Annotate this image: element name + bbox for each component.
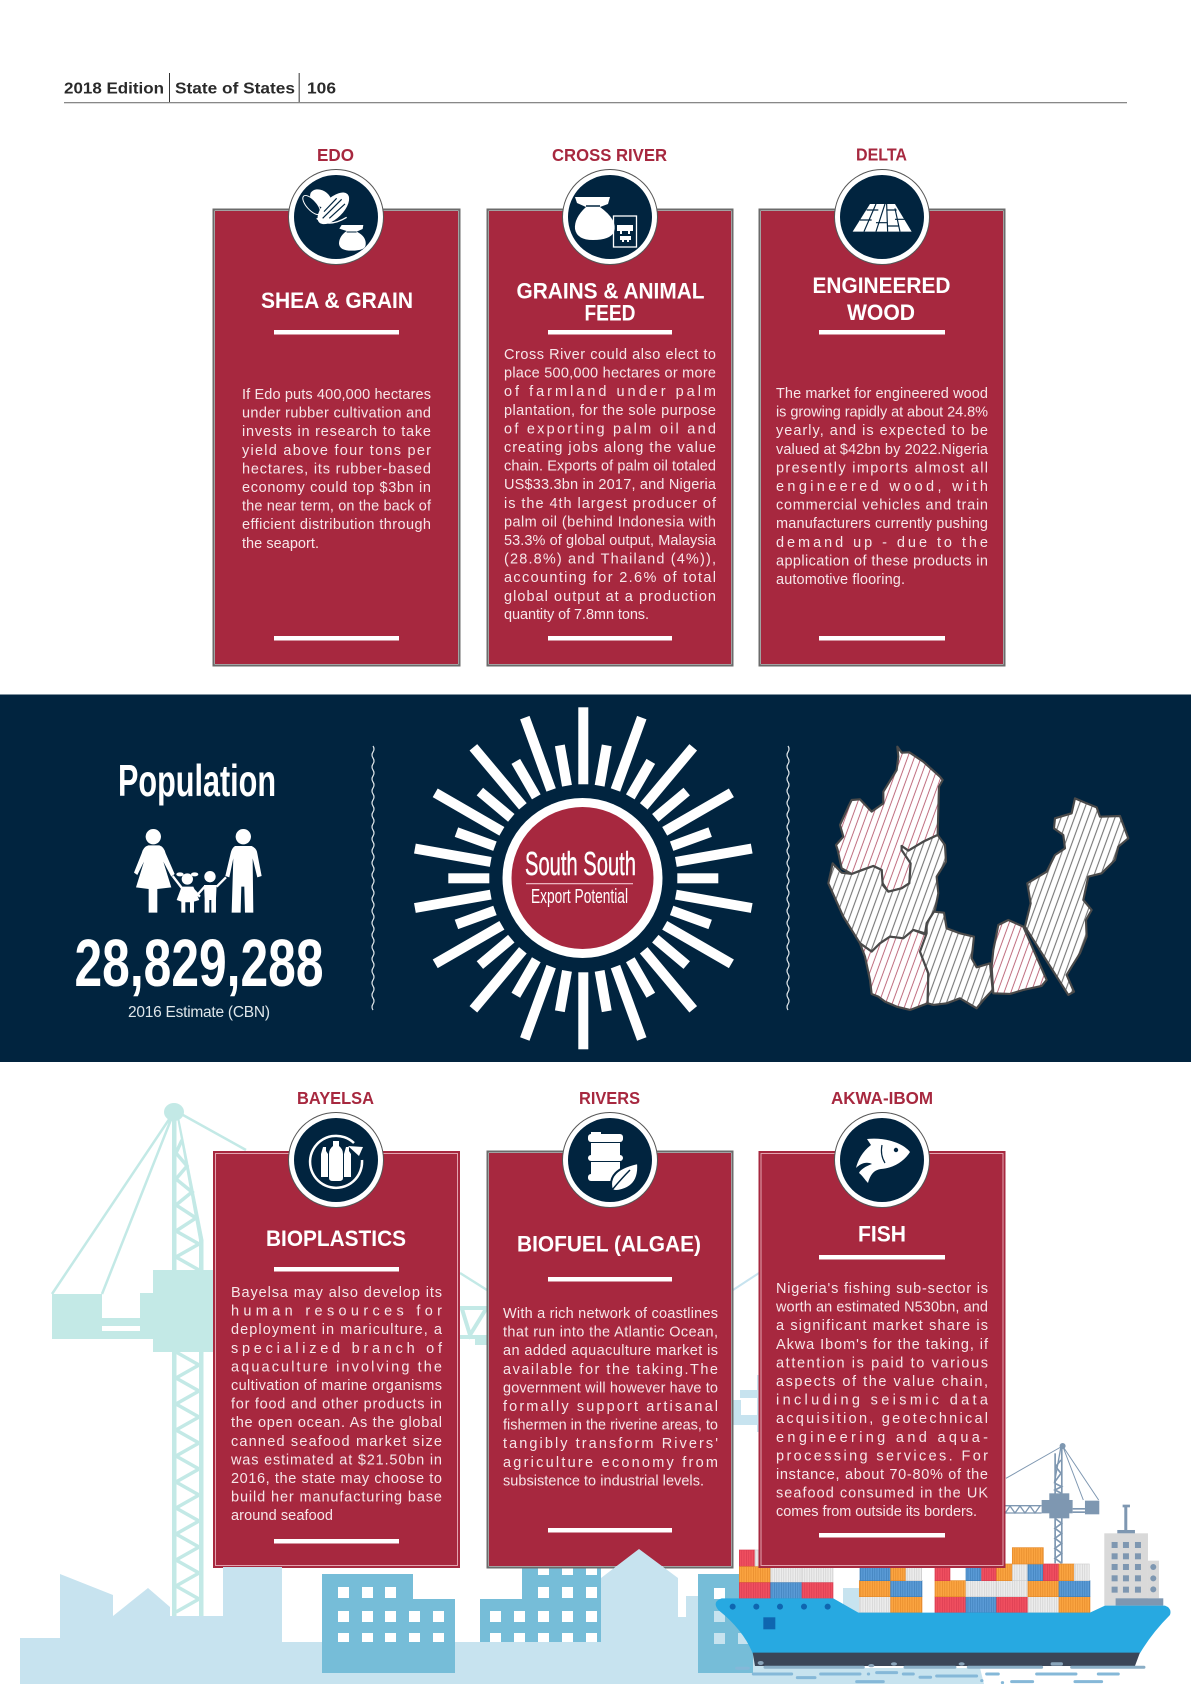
icon: fish — [834, 1112, 930, 1208]
icon: family — [134, 829, 262, 913]
body text: Cross River could also elect to — [504, 347, 716, 363]
body text: quantity of 7.8mn tons. — [504, 607, 649, 623]
body text: aquaculture involving the — [231, 1359, 442, 1375]
panel: Delta engineered wood — [758, 144, 1006, 666]
centre circle — [502, 798, 662, 958]
illustration: container ship and port crane — [716, 1443, 1171, 1683]
map region: Delta — [828, 835, 946, 952]
state label: CROSS RIVER — [552, 145, 667, 165]
body text: formally support artisanal — [503, 1399, 718, 1415]
body text: seafood consumed in the UK — [776, 1486, 988, 1502]
sunburst badge — [414, 707, 753, 1049]
edition label: 2018 Edition — [64, 80, 164, 98]
body text: was estimated at $21.50bn in — [230, 1452, 442, 1468]
sunburst rays — [414, 707, 753, 1049]
body text: chain. Exports of palm oil totaled — [504, 459, 716, 475]
panel: population and map band — [0, 694, 1191, 1062]
body text — [775, 1281, 989, 1520]
icon: barrel and leaf — [562, 1112, 658, 1208]
body text: including seismic data — [776, 1393, 989, 1409]
body text: fishermen in the riverine areas, to — [503, 1418, 718, 1434]
illustration: blue building left — [322, 1574, 455, 1673]
body text: that run into the Atlantic Ocean, — [503, 1325, 718, 1341]
body text: application of these products in — [776, 553, 988, 569]
illustration: large harbour crane — [52, 1103, 760, 1616]
map region: Cross River — [1025, 798, 1128, 995]
body text: worth an estimated N530bn, and — [775, 1300, 988, 1316]
body text: presently imports almost all — [776, 460, 988, 476]
body text: economy could top $3bn in — [242, 480, 431, 496]
body text: government will however have to — [503, 1380, 718, 1396]
heading: FISH — [858, 1222, 906, 1246]
body text: 53.3% of global output, Malaysia — [504, 533, 717, 549]
state label: DELTA — [856, 144, 907, 164]
icon: recycled bottles — [288, 1112, 384, 1208]
heading: ENGINEERED — [812, 273, 950, 298]
body text: the near term, on the back of — [242, 499, 432, 515]
body text: processing services. For — [776, 1448, 988, 1464]
body text: hectares, its rubber-based — [242, 461, 431, 477]
icon: shea nuts and sack — [288, 169, 384, 265]
body text: for food and other products in — [231, 1397, 442, 1413]
body text: comes from outside its borders. — [776, 1504, 977, 1520]
body text: an added aquaculture market is — [503, 1343, 718, 1359]
body text: global output at a production — [504, 589, 716, 605]
body text: plantation, for the sole purpose — [504, 403, 716, 419]
state label: RIVERS — [579, 1088, 640, 1108]
body text — [230, 1285, 443, 1524]
body text: under rubber cultivation and — [242, 406, 431, 422]
body text: deployment in mariculture, a — [231, 1322, 443, 1338]
body text: of exporting palm oil and — [504, 421, 716, 437]
body text: automotive flooring. — [776, 572, 905, 588]
body text: is growing rapidly at about 24.8% — [776, 405, 988, 421]
body text: demand up - due to the — [776, 535, 988, 551]
body text: US$33.3bn in 2017, and Nigeria — [504, 477, 717, 493]
body text — [242, 387, 432, 552]
map region: Edo — [836, 747, 943, 892]
icon: wood planks — [834, 169, 930, 265]
body text: specialized branch of — [231, 1341, 443, 1357]
body text: a significant market share is — [776, 1318, 988, 1334]
badge subtitle: Export Potential — [531, 886, 628, 908]
body text: creating jobs along the value — [504, 440, 716, 456]
ship superstructure — [1104, 1505, 1163, 1606]
body text: 2016, the state may choose to — [231, 1471, 442, 1487]
body text: (28.8%) and Thailand (4%)), — [504, 552, 716, 568]
body text: available for the taking.The — [503, 1362, 718, 1378]
state label: AKWA-IBOM — [831, 1088, 933, 1108]
body text: tangibly transform Rivers' — [503, 1436, 718, 1452]
body text: engineered wood, with — [776, 479, 988, 495]
body text: yearly, and is expected to be — [776, 423, 988, 439]
state label: EDO — [317, 145, 354, 165]
body text: accounting for 2.6% of total — [504, 570, 716, 586]
icon: grain sack and feed bag — [562, 169, 658, 265]
body text: is the 4th largest producer of — [504, 496, 717, 512]
body text: acquisition, geotechnical — [776, 1411, 988, 1427]
illustration: blue building behind skyline — [480, 1560, 601, 1642]
body text: commercial vehicles and train — [776, 498, 988, 514]
cargo containers — [739, 1548, 1090, 1613]
body text: instance, about 70-80% of the — [776, 1467, 988, 1483]
body text: engineering and aqua- — [776, 1430, 988, 1446]
body text: build her manufacturing base — [231, 1490, 442, 1506]
body text — [776, 386, 989, 588]
body text: Bayelsa may also develop its — [231, 1285, 442, 1301]
water ripples — [737, 1667, 1144, 1683]
heading: GRAINS & ANIMAL — [516, 278, 704, 304]
body text: With a rich network of coastlines — [503, 1306, 718, 1322]
body text: attention is paid to various — [776, 1355, 988, 1371]
body text: place 500,000 hectares or more — [504, 366, 716, 382]
heading: FEED — [584, 300, 636, 326]
body text: human resources for — [231, 1304, 442, 1320]
body text: around seafood — [231, 1508, 333, 1524]
body text: The market for engineered wood — [776, 386, 988, 402]
state label: BAYELSA — [297, 1088, 374, 1108]
body text: of farmland under palm — [504, 384, 716, 400]
map region: Rivers — [920, 912, 993, 1008]
panel: Rivers biofuel — [486, 1088, 734, 1568]
heading: BIOPLASTICS — [266, 1226, 406, 1251]
body text: invests in research to take — [242, 424, 431, 440]
illustration: blue building right — [698, 1574, 753, 1673]
body text: Akwa Ibom's for the taking, if — [776, 1337, 989, 1353]
map region: Akwa Ibom — [992, 920, 1047, 994]
heading — [516, 278, 704, 326]
body text: efficient distribution through — [242, 517, 431, 533]
population source: 2016 Estimate (CBN) — [128, 1004, 270, 1021]
body text — [504, 347, 717, 623]
panel: Bayelsa bioplastics — [213, 1088, 460, 1568]
illustration: pale skyline — [20, 1549, 984, 1684]
ship hull — [716, 1598, 1171, 1667]
body text: If Edo puts 400,000 hectares — [242, 387, 431, 403]
body text: yield above four tons per — [242, 443, 431, 459]
body text: Nigeria's fishing sub-sector is — [776, 1281, 988, 1297]
map: South South states — [828, 747, 1128, 1010]
body text — [503, 1306, 718, 1489]
port crane — [1005, 1443, 1099, 1563]
body text: subsistence to industrial levels. — [503, 1473, 704, 1489]
body text: manufacturers currently pushing — [776, 516, 988, 532]
body text: agriculture economy from — [503, 1455, 718, 1471]
body text: cultivation of marine organisms — [231, 1378, 442, 1394]
population figure: 28,829,288 — [74, 926, 324, 1001]
population heading: Population — [118, 757, 276, 806]
body text: the seaport. — [242, 536, 319, 552]
body text: palm oil (behind Indonesia with — [504, 514, 716, 530]
heading: SHEA & GRAIN — [261, 288, 413, 313]
page header — [64, 73, 1127, 103]
map region: Bayelsa — [860, 930, 928, 1010]
publication label: State of States — [175, 80, 295, 98]
panel: Edo shea and grain — [212, 145, 460, 666]
heading — [812, 273, 950, 325]
body text: the open ocean. As the global — [231, 1415, 442, 1431]
heading: BIOFUEL (ALGAE) — [517, 1232, 701, 1256]
page number: 106 — [307, 80, 336, 98]
panel: Akwa Ibom fish — [758, 1088, 1006, 1568]
panel: Cross River grains and animal feed — [486, 145, 734, 666]
body text: aspects of the value chain, — [776, 1374, 988, 1390]
body text: valued at $42bn by 2022.Nigeria — [776, 442, 989, 458]
body text: canned seafood market size — [231, 1434, 442, 1450]
heading: WOOD — [847, 300, 915, 325]
badge title: South South — [525, 845, 636, 882]
